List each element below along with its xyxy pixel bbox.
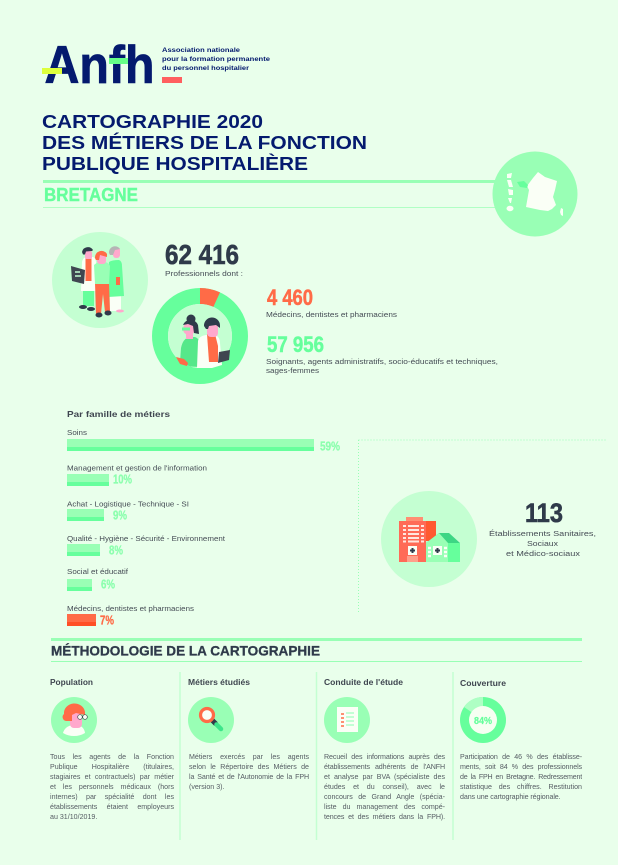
text block: Recueil des informations auprès des (324, 752, 445, 760)
title: DES MÉTIERS DE LA FONCTION (42, 132, 367, 153)
bar: Médecins (67, 606, 195, 628)
bar: Management: 10% (113, 472, 132, 486)
title (42, 111, 367, 174)
text block: internes) par spécialité dont les (50, 792, 174, 800)
text block: statistique des chiffres. Restitution (460, 782, 582, 790)
stat: 57 956 non-medical staff: Soignants, agents administratifs, socio-éducatifs et techniques, (266, 359, 498, 366)
stat: 4 460 medical staff: 4 460 (267, 285, 313, 310)
title: PUBLIQUE HOSPITALIÈRE (42, 153, 308, 174)
text block: ments, soit 84 % des professionnels (460, 762, 582, 770)
bar: Qualité (67, 536, 225, 558)
region heading: Bretagne (43, 180, 498, 208)
column: Population: Population (50, 678, 93, 687)
heading: methodology (51, 638, 582, 662)
column: Métiers étudiés (188, 678, 309, 794)
icon: group of professionals (52, 232, 148, 328)
illustration: man (197, 317, 230, 368)
icon: hospital buildings (381, 491, 477, 587)
logo: Anfh: Anfh (44, 36, 154, 95)
illustration: woman (176, 314, 200, 367)
bar: Qualité: Qualité - Hygiène - Sécurité - Environnement (67, 536, 225, 543)
person: back left (71, 247, 96, 311)
column: Couverture (460, 679, 582, 804)
text block: liste du management des compé- (324, 802, 445, 810)
icon: magnifier (188, 697, 234, 743)
stat: 113 establishments: 113 (525, 498, 563, 528)
donut: 84% coverage: 84% (474, 716, 492, 727)
bar: Qualité: 8% (109, 544, 123, 558)
stat: 113 establishments: Sociaux (527, 541, 559, 548)
text block: établissements adhérents de l'ANFH (324, 762, 445, 770)
bar: Social (67, 569, 128, 592)
column: Population (50, 678, 174, 824)
text block: (version 3). (189, 782, 224, 790)
column: Conduite de l'étude: Conduite de l'étude (324, 678, 404, 687)
stat: 113 establishments: et Médico-sociaux (506, 551, 581, 558)
text block: dans une cartographie régionale. (460, 792, 561, 800)
text block: au 31/10/2019. (50, 812, 97, 820)
text block: stagiaires et contractuels) par métier (50, 772, 174, 780)
bar chart: job families (67, 409, 340, 628)
logo: Anfh (42, 36, 270, 95)
bar: Social: 6% (101, 578, 115, 592)
bar: Achat: 9% (113, 508, 127, 522)
heading: methodology: MÉTHODOLOGIE DE LA CARTOGRAPHIE (51, 642, 320, 658)
stat: 4 460 medical staff (266, 285, 398, 319)
logo: Anfh: Association nationale (162, 47, 240, 54)
stat: 113 establishments (489, 498, 596, 558)
column: Métiers étudiés: Métiers étudiés (188, 678, 251, 687)
total: 62 416 professionals: 62 416 (165, 239, 239, 270)
text block: Publique Hospitalière (titulaires, (50, 762, 174, 770)
text block: tences et des métiers dans la FPH). (324, 812, 445, 820)
text block: Tous les agents de la Fonction (50, 752, 174, 760)
icon: map of France (492, 152, 578, 236)
donut chart: medical vs non-medical (160, 288, 240, 376)
title: CARTOGRAPHIE 2020 (42, 111, 263, 132)
text block: concours de Grand Angle (spécia- (324, 792, 445, 800)
bar: Management (67, 466, 207, 486)
text block: Participation de 46 % des établisse- (460, 752, 582, 760)
stat: 57 956 non-medical staff: 57 956 (267, 332, 324, 357)
bar: Achat: Achat - Logistique - Technique - SI (67, 502, 189, 508)
bar: Soins (67, 430, 340, 454)
bar: Social: Social et éducatif (67, 569, 128, 576)
text block: études et du conseil), avec le (324, 782, 445, 790)
icon: checklist (324, 697, 370, 743)
text block (189, 752, 309, 794)
text block: et analyse par BVA (spécialiste des (324, 772, 445, 780)
region heading: Bretagne: BRETAGNE (44, 185, 138, 205)
logo: Anfh: pour la formation permanente (162, 56, 270, 63)
person: centre (94, 251, 112, 318)
text block: et les personnels médicaux (hors (50, 782, 174, 790)
column: Couverture: Couverture (460, 679, 507, 688)
text block (324, 752, 445, 824)
bar: Soins: Soins (67, 430, 88, 437)
bar: Médecins: Médecins, dentistes et pharmaciens (67, 606, 195, 613)
column: Conduite de l'étude (324, 678, 445, 824)
text block: établissements étaient employeurs (50, 802, 174, 810)
bar: Soins: 59% (320, 440, 340, 454)
text block: Métiers exercés par les agents (189, 752, 309, 760)
chart heading: Par famille de métiers (67, 409, 170, 419)
bar: Médecins: 7% (100, 614, 114, 628)
logo: Anfh: du personnel hospitalier (162, 65, 249, 72)
bar: Achat (67, 502, 189, 522)
text block: la Santé et de l'Autonomie de la FPH (189, 772, 309, 780)
text block (50, 752, 174, 824)
stat: 113 establishments: Établissements Sanitaires, (489, 529, 596, 538)
bar: Management: Management et gestion de l'information (67, 466, 207, 472)
stat: 4 460 medical staff: Médecins, dentistes et pharmaciens (266, 312, 398, 319)
total: 62 416 professionals: Professionnels dont : (165, 271, 243, 278)
text block: selon le Répertoire des Métiers de (189, 762, 309, 770)
person: right (108, 246, 124, 312)
text block (460, 752, 582, 804)
stat: 57 956 non-medical staff: sages-femmes (266, 368, 320, 375)
stat: 57 956 non-medical staff (266, 332, 498, 375)
icon: doctor (51, 697, 97, 743)
text block: de la FPH en Bretagne. Redressement (460, 772, 582, 780)
